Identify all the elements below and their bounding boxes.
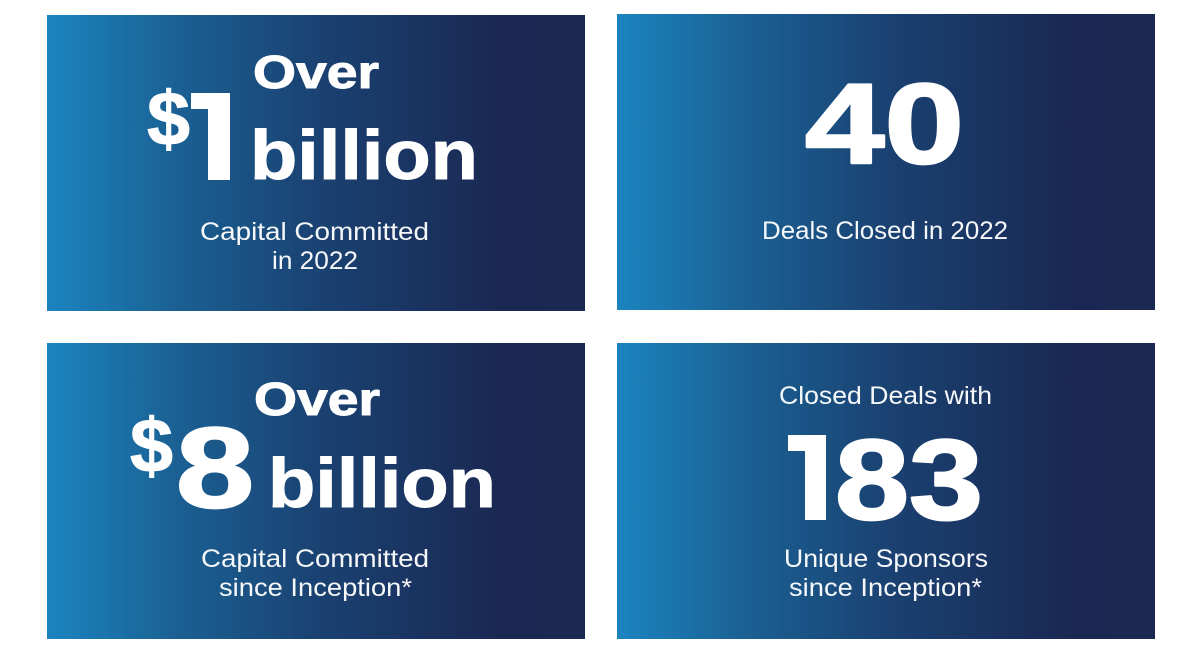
panel background	[617, 14, 1155, 310]
caption: Capital Committed	[200, 218, 429, 246]
panel: capital committed since inception	[47, 343, 585, 639]
stat: over $8 billion: Over	[254, 373, 380, 425]
caption: in 2022	[272, 247, 358, 275]
stat: 40: 40	[805, 61, 964, 188]
panel background	[47, 15, 585, 311]
stat: 183: 1	[772, 412, 839, 546]
stat: over $1 billion: Over	[253, 46, 379, 98]
stat: over $1 billion: 1	[176, 70, 244, 206]
panel: closed deals with unique sponsors	[617, 343, 1155, 639]
panel: capital committed in 2022	[47, 15, 585, 311]
stat: over $8 billion: $	[130, 404, 173, 489]
stat: over $1 billion: billion	[250, 116, 478, 194]
caption	[200, 218, 429, 275]
panel: deals closed in 2022	[617, 14, 1155, 310]
caption: Capital Committed	[201, 545, 429, 573]
stat: over $1 billion	[147, 55, 474, 180]
stat: over $8 billion: 8	[176, 405, 254, 532]
stat: 183	[788, 435, 980, 522]
stat: 183: 83	[835, 417, 983, 544]
caption: since Inception*	[219, 574, 412, 602]
caption: since Inception*	[789, 574, 982, 602]
caption: Unique Sponsors	[784, 545, 988, 573]
panel background	[47, 343, 585, 639]
stat: over $8 billion: billion	[268, 444, 496, 522]
caption	[201, 545, 429, 602]
stat: over $8 billion	[130, 373, 496, 532]
heading: Closed Deals with	[779, 382, 992, 410]
panel background	[617, 343, 1155, 639]
caption: Deals Closed in 2022	[762, 217, 1008, 245]
caption	[784, 545, 988, 602]
stat: over $1 billion: $	[147, 77, 190, 162]
